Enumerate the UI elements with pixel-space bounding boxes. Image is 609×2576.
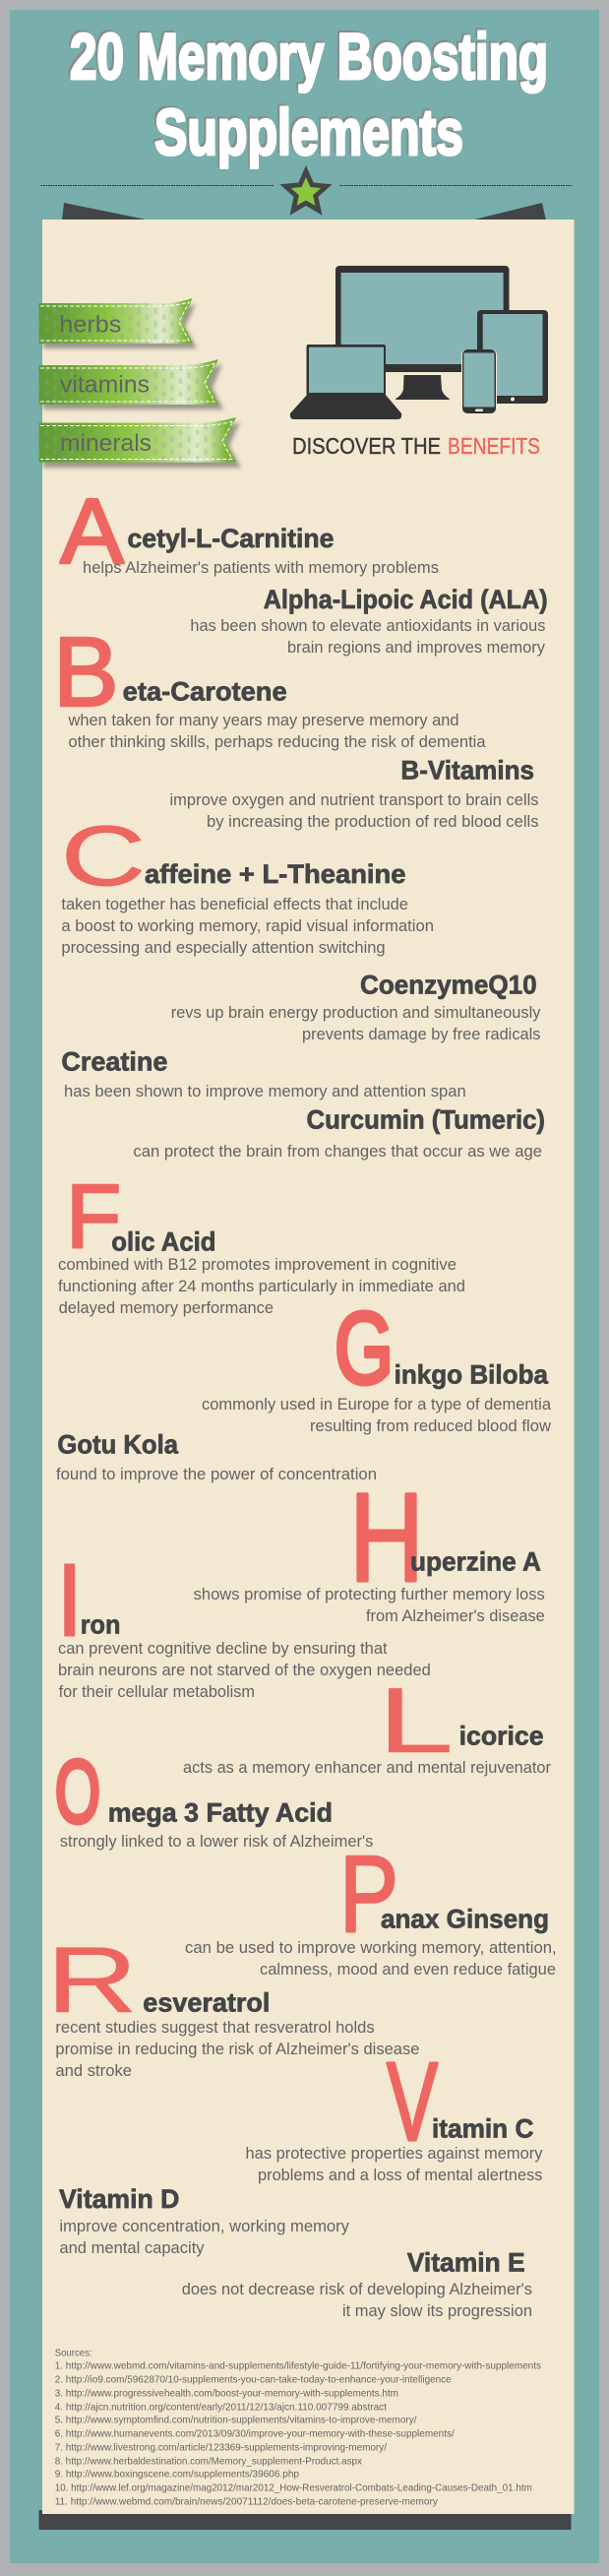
heading: esveratrol — [143, 1988, 270, 2018]
heading: icorice — [459, 1722, 544, 1751]
entry: Alpha-Lipoic Acid — [190, 585, 548, 657]
drop cap I: I — [55, 1542, 84, 1659]
drop cap H: H — [349, 1468, 424, 1608]
description: calmness, mood and even reduce fatigue — [260, 1961, 556, 1979]
description: problems and a loss of mental alertness — [258, 2167, 543, 2184]
description: commonly used in Europe for a type of dementia — [202, 1396, 552, 1414]
description: for their cellular metabolism — [59, 1683, 255, 1701]
description — [59, 2218, 350, 2257]
drop cap A: A — [60, 479, 124, 583]
entry: Vitamin C — [246, 2040, 543, 2184]
sources: Sources: — [55, 2348, 92, 2359]
description — [58, 1256, 465, 1317]
description: it may slow its progression — [342, 2302, 532, 2320]
description: does not decrease risk of developing Alzheimer's — [182, 2281, 532, 2298]
entry: Curcumin — [133, 1105, 545, 1161]
drop cap V: V — [387, 2040, 438, 2164]
description — [194, 1586, 545, 1625]
description: functioning after 24 months particularly in immediate and — [58, 1278, 465, 1295]
drop cap F: F — [66, 1166, 121, 1267]
entry: Beta-Carotene — [53, 617, 486, 751]
drop cap P: P — [339, 1834, 398, 1955]
description: a boost to working memory, rapid visual information — [61, 917, 434, 935]
drop cap L: L — [378, 1668, 454, 1772]
title: Supplements — [154, 95, 463, 168]
sources: 7. http://www.livestrong.com/article/123369-supplements-improving-memory/ — [55, 2442, 387, 2454]
description: from Alzheimer's disease — [366, 1607, 545, 1625]
description: prevents damage by free radicals — [302, 1026, 541, 1043]
description: can protect the brain from changes that occur as we age — [133, 1143, 542, 1161]
description — [182, 2281, 532, 2320]
entry: Folic Acid — [58, 1166, 465, 1317]
description: can be used to improve working memory, attention, — [185, 1939, 557, 1957]
entry: Vitamin E — [182, 2248, 532, 2320]
description — [58, 1640, 431, 1701]
description: brain neurons are not starved of the oxygen needed — [58, 1662, 431, 1679]
description: can prevent cognitive decline by ensuring that — [58, 1640, 388, 1658]
heading: Gotu Kola — [57, 1430, 179, 1460]
icon: desktop monitor — [335, 266, 510, 400]
description: has been shown to elevate antioxidants in various — [190, 617, 545, 635]
sources: 3. http://www.progressivehealth.com/boost-your-memory-with-supplements.htm — [55, 2388, 398, 2400]
description: acts as a memory enhancer and mental rejuvenator — [183, 1759, 551, 1777]
drop cap B: B — [53, 617, 119, 727]
description: helps Alzheimer's patients with memory problems — [83, 559, 439, 577]
entry: Panax Ginseng — [185, 1834, 557, 1979]
sources: 11. http://www.webmd.com/brain/news/20071112/does-beta-carotene-preserve-memory — [55, 2496, 439, 2508]
heading: ron — [81, 1610, 120, 1640]
sources: 8. http://www.herbaldestination.com/Memory_supplement-Product.aspx — [55, 2456, 363, 2468]
description: improve concentration, working memory — [59, 2218, 350, 2235]
description: when taken for many years may preserve memory and — [68, 712, 458, 729]
entry: Vitamin D — [59, 2184, 350, 2257]
entry: B-Vitamins — [169, 756, 539, 831]
heading: olic Acid — [111, 1227, 216, 1257]
description: revs up brain energy production and simultaneously — [171, 1004, 541, 1022]
tagline: BENEFITS — [448, 433, 540, 459]
title — [68, 18, 548, 168]
heading: affeine + L-Theanine — [145, 859, 405, 889]
heading: inkgo Biloba — [395, 1360, 549, 1390]
sources: 4. http://ajcn.nutrition.org/content/early/2011/12/13/ajcn.110.007799.abstract — [55, 2402, 387, 2414]
icon: laptop — [290, 345, 401, 419]
sources: 1. http://www.webmd.com/vitamins-and-supplements/lifestyle-guide-11/fortifying-your-memory-with-supplements — [55, 2360, 541, 2372]
sources: 6. http://www.humanevents.com/2013/09/30/improve-your-memory-with-these-supplements/ — [55, 2428, 455, 2440]
heading: uperzine A — [410, 1547, 541, 1577]
description — [202, 1396, 552, 1435]
sources — [55, 2348, 541, 2508]
description: resulting from reduced blood flow — [310, 1417, 551, 1435]
icon: tablet — [477, 310, 548, 404]
ribbon: herbs — [39, 298, 197, 348]
description: has protective properties against memory — [246, 2145, 543, 2163]
entry: CoenzymeQ10 — [171, 971, 541, 1043]
icon: star — [279, 165, 333, 216]
heading: Creatine — [61, 1047, 167, 1077]
description — [185, 1939, 557, 1979]
heading: B-Vitamins — [400, 756, 534, 785]
description: and stroke — [55, 2062, 132, 2080]
drop cap C: C — [61, 809, 146, 904]
entry: Licorice — [183, 1668, 551, 1777]
heading: CoenzymeQ10 — [360, 971, 537, 1000]
ribbon: herbs: herbs — [59, 312, 121, 339]
heading: Curcumin (Tumeric) — [307, 1105, 545, 1135]
entry: Huperzine A — [194, 1468, 545, 1625]
entry: Iron — [55, 1542, 431, 1701]
heading: Vitamin D — [59, 2184, 179, 2214]
sources: 5. http://www.symptomfind.com/nutrition-supplements/vitamins-to-improve-memory/ — [55, 2415, 417, 2426]
description — [68, 712, 486, 751]
sources: 2. http://io9.com/5962870/10-supplements-you-can-take-today-to-enhance-your-intelligence — [55, 2374, 452, 2386]
description: has been shown to improve memory and attention span — [64, 1083, 466, 1100]
entry: Resveratrol — [46, 1928, 419, 2080]
cream content panel — [42, 220, 575, 2514]
description: strongly linked to a lower risk of Alzheimer's — [60, 1833, 373, 1851]
description: and mental capacity — [59, 2239, 205, 2257]
heading: Alpha-Lipoic Acid (ALA) — [264, 585, 548, 614]
entry: Gotu Kola — [56, 1430, 377, 1483]
description: by increasing the production of red blood cells — [207, 813, 539, 831]
bottom dark strip — [39, 2510, 571, 2530]
description: taken together has beneficial effects that include — [61, 896, 408, 913]
entry: Omega 3 Fatty Acid — [55, 1743, 373, 1851]
ribbon: vitamins — [39, 359, 223, 409]
tagline — [292, 433, 540, 459]
drop cap G: G — [335, 1291, 394, 1405]
heading: cetyl-L-Carnitine — [128, 524, 335, 553]
description — [61, 896, 434, 957]
description: other thinking skills, perhaps reducing the risk of dementia — [69, 733, 486, 751]
tagline: DISCOVER THE — [292, 433, 441, 459]
sources: 10. http://www.lef.org/magazine/mag2012/mar2012_How-Resveratrol-Combats-Leading-Causes-Death_01.htm — [55, 2482, 532, 2494]
description: recent studies suggest that resveratrol holds — [55, 2019, 375, 2037]
ribbon: minerals: minerals — [60, 430, 152, 457]
drop cap O: O — [55, 1743, 100, 1842]
title: Supplements — [152, 94, 461, 166]
drop cap R: R — [46, 1928, 138, 2033]
description — [171, 1004, 541, 1043]
entry: Caffeine + L-Theanine — [61, 809, 434, 957]
description: shows promise of protecting further memory loss — [194, 1586, 545, 1603]
description: delayed memory performance — [59, 1299, 274, 1317]
ribbon: minerals — [39, 417, 241, 468]
description — [55, 2019, 419, 2080]
description — [169, 791, 539, 831]
entry: Acetyl-L-Carnitine — [60, 479, 439, 583]
description: improve oxygen and nutrient transport to brain cells — [169, 791, 539, 809]
description — [190, 617, 546, 657]
icon: devices — [290, 266, 548, 419]
description: processing and especially attention switching — [61, 939, 386, 957]
description: promise in reducing the risk of Alzheimer's disease — [55, 2041, 419, 2058]
entry: Ginkgo Biloba — [202, 1291, 552, 1435]
entry: Creatine — [61, 1047, 466, 1100]
sources: 9. http://www.boxingscene.com/supplements/39606.php — [55, 2469, 299, 2481]
heading: mega 3 Fatty Acid — [108, 1798, 333, 1828]
ribbon: vitamins: vitamins — [60, 372, 150, 399]
description: found to improve the power of concentration — [56, 1466, 377, 1483]
top banner tails — [62, 203, 546, 220]
description — [246, 2145, 543, 2184]
heading: anax Ginseng — [381, 1905, 549, 1934]
heading: Vitamin E — [407, 2248, 525, 2278]
description: brain regions and improves memory — [287, 639, 546, 657]
heading: eta-Carotene — [123, 677, 287, 707]
description: combined with B12 promotes improvement in cognitive — [58, 1256, 457, 1274]
heading: itamin C — [432, 2114, 533, 2144]
icon: phone — [461, 349, 497, 413]
